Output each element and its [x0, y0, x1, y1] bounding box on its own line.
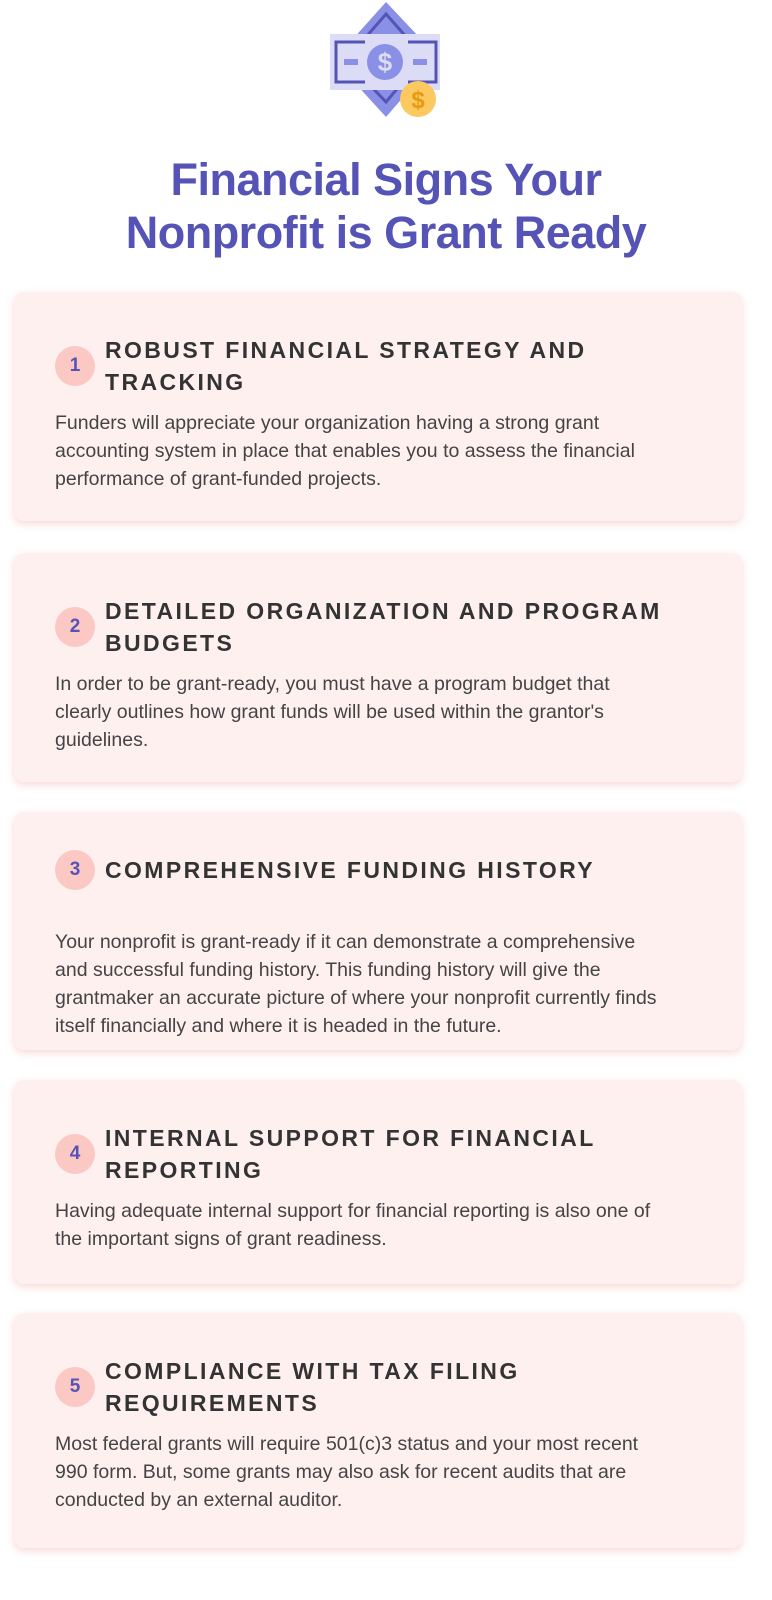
text 4: Having adequate internal support for financial reporting is also one of	[55, 1200, 650, 1222]
heading 3: COMPREHENSIVE FUNDING HISTORY	[105, 857, 595, 883]
heading 4	[55, 1125, 596, 1183]
text 2	[55, 673, 610, 751]
text 5: 990 form. But, some grants may also ask for recent audits that are	[55, 1461, 626, 1483]
panel: card 2	[14, 553, 742, 782]
text 2: In order to be grant-ready, you must have a program budget that	[55, 673, 610, 695]
heading 1	[55, 337, 586, 395]
panel: card 3	[14, 812, 742, 1050]
heading 3: 3	[70, 859, 80, 880]
heading 5: 5	[70, 1376, 80, 1397]
heading 1: 1	[70, 355, 80, 376]
title: Nonprofit is Grant Ready	[126, 207, 646, 258]
panel: card 1	[14, 292, 742, 521]
heading 3	[55, 850, 595, 890]
heading 5	[55, 1358, 520, 1416]
heading 2	[55, 598, 662, 656]
text 4	[55, 1200, 650, 1250]
heading 4: INTERNAL SUPPORT FOR FINANCIAL	[105, 1125, 596, 1151]
heading 2: BUDGETS	[105, 630, 234, 656]
panel: card 4	[14, 1080, 742, 1284]
text 1: Funders will appreciate your organization having a strong grant	[55, 412, 599, 434]
heading 4: 4	[70, 1143, 80, 1164]
text 3: and successful funding history. This funding history will give the	[55, 959, 601, 981]
text 2: guidelines.	[55, 729, 148, 751]
text 5: Most federal grants will require 501(c)3 status and your most recent	[55, 1433, 638, 1455]
icon: money bill with coin	[330, 2, 440, 117]
text 3	[55, 931, 657, 1037]
heading 5: REQUIREMENTS	[105, 1390, 319, 1416]
panel: card 5	[14, 1313, 742, 1548]
heading 4: REPORTING	[105, 1157, 263, 1183]
text 3: Your nonprofit is grant-ready if it can demonstrate a comprehensive	[55, 931, 635, 953]
title: Financial Signs Your	[171, 154, 601, 205]
text 4: the important signs of grant readiness.	[55, 1228, 387, 1250]
text 1: performance of grant-funded projects.	[55, 468, 381, 490]
heading 5: COMPLIANCE WITH TAX FILING	[105, 1358, 520, 1384]
icon: money bill with coin: $	[378, 47, 393, 77]
text 1	[55, 412, 635, 490]
heading 2: DETAILED ORGANIZATION AND PROGRAM	[105, 598, 662, 624]
heading 2: 2	[70, 616, 80, 637]
text 2: clearly outlines how grant funds will be used within the grantor's	[55, 701, 604, 723]
icon: money bill with coin: $	[411, 87, 425, 114]
text 3: itself financially and where it is headed in the future.	[55, 1015, 502, 1037]
text 5	[55, 1433, 638, 1511]
text 3: grantmaker an accurate picture of where your nonprofit currently finds	[55, 987, 657, 1009]
text 5: conducted by an external auditor.	[55, 1489, 342, 1511]
heading 1: TRACKING	[105, 369, 246, 395]
text 1: accounting system in place that enables you to assess the financial	[55, 440, 635, 462]
heading 1: ROBUST FINANCIAL STRATEGY AND	[105, 337, 586, 363]
title	[126, 154, 646, 258]
